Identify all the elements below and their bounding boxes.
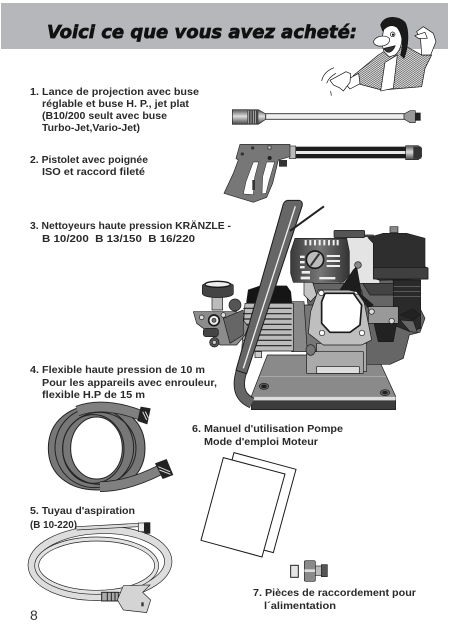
item 2 text: 2. Pistolet avec poignée [30, 154, 148, 166]
icon: spray gun [224, 144, 422, 202]
pump and gauge [193, 281, 363, 373]
item 3 text: 3. Nettoyeurs haute pression KRÄNZLE - [30, 219, 231, 232]
icon: spray lance [232, 110, 421, 124]
item 1 text [30, 86, 199, 134]
item 1 text: Turbo-Jet,Vario-Jet) [42, 122, 140, 134]
item 6 text [192, 423, 343, 448]
item 5 text: (B 10-220) [30, 520, 77, 531]
frame handle [236, 200, 324, 403]
icon: cartoon man pointing [322, 17, 436, 96]
base plate [251, 355, 396, 410]
engine [291, 227, 428, 372]
page number: 8 [30, 607, 38, 623]
item 4 text [30, 364, 217, 401]
item 4 text: 4. Flexible haute pression de 10 m [30, 364, 205, 376]
item 7 text: 7. Pièces de raccordement pour [253, 587, 416, 599]
item 7 text [253, 587, 416, 612]
item 3 text: B 10/200 B 13/150 B 16/220 [42, 234, 196, 245]
item 5 text: 5. Tuyau d'aspiration [30, 505, 135, 517]
item 5 text [30, 505, 135, 531]
item 4 text: flexible H.P de 15 m [42, 389, 145, 401]
item 3 text [30, 219, 231, 245]
item 4 text: Pour les appareils avec enrouleur, [42, 377, 217, 389]
title: Voici ce que vous avez acheté: [47, 23, 357, 43]
item 1 text: réglable et buse H. P., jet plat [42, 98, 189, 110]
icon: high pressure hose coil [48, 405, 173, 490]
item 7 text: l´alimentation [264, 600, 336, 612]
icon: connection parts [291, 561, 327, 581]
title banner [1, 3, 448, 49]
item 6 text: 6. Manuel d'utilisation Pompe [192, 423, 343, 435]
item 6 text: Mode d'emploi Moteur [204, 436, 318, 448]
pressure washer machine [193, 200, 428, 410]
item 1 text: (B10/200 seult avec buse [42, 110, 167, 122]
icon: manuals [201, 453, 296, 557]
item 1 text: 1. Lance de projection avec buse [30, 86, 199, 98]
icon: suction hose [31, 522, 169, 613]
item 2 text [30, 154, 148, 178]
item 2 text: ISO et raccord fileté [42, 166, 145, 178]
